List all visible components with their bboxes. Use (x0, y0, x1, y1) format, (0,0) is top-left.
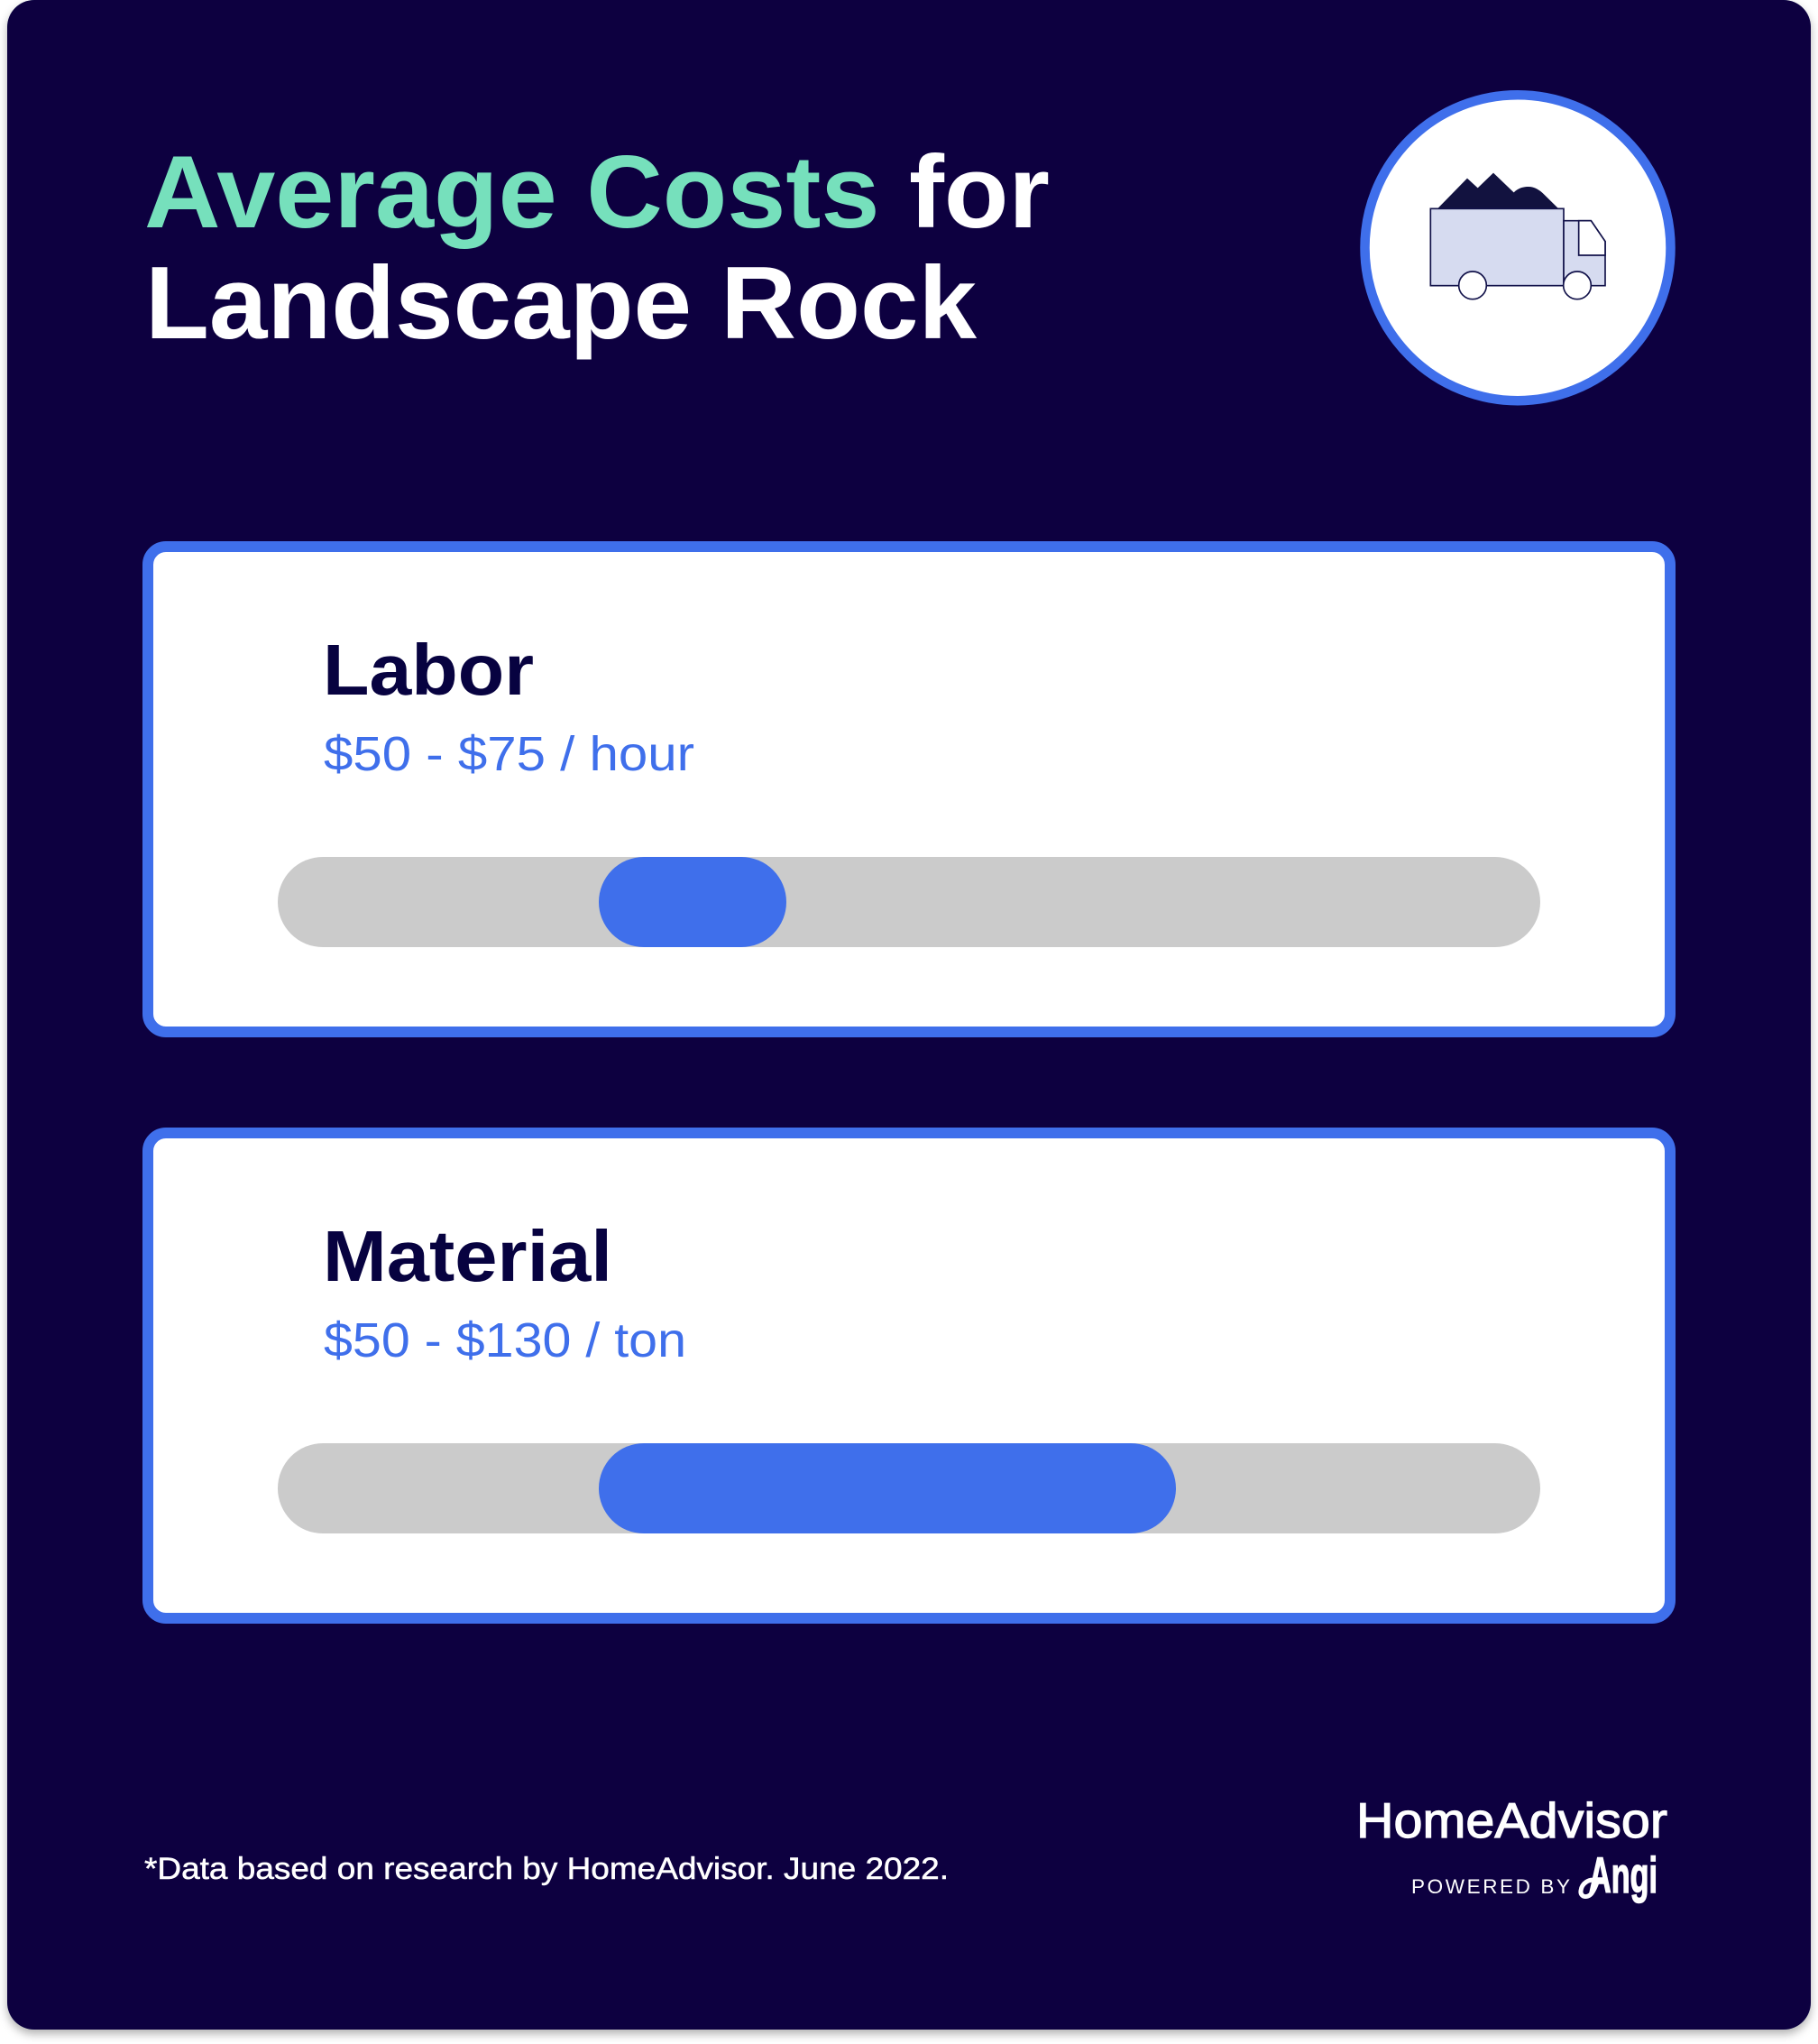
HomeAdvisor wordmark: HomeAdvisor (1356, 1792, 1667, 1848)
title line 2: Landscape Rock (145, 246, 978, 361)
title line 1: Average Costs for (144, 135, 1050, 250)
logo: HomeAdvisor powered by Angi (1356, 1792, 1667, 1903)
material range bar (278, 1443, 1540, 1533)
material heading: Material (323, 1216, 612, 1296)
labor heading: Labor (323, 630, 534, 710)
bar highlighted range (599, 1443, 1176, 1533)
truck (1430, 173, 1605, 299)
cab window (1579, 221, 1605, 255)
card frame (148, 1133, 1670, 1618)
Angi text: Angi (1589, 1846, 1657, 1903)
cargo box (1430, 208, 1564, 286)
Angi wordmark (1581, 1846, 1657, 1903)
bar track (278, 857, 1540, 947)
rock pile (1437, 173, 1558, 208)
bar highlighted range (599, 857, 786, 947)
title (144, 135, 1050, 361)
icon: truck carrying rocks in circle (1365, 95, 1670, 401)
cab (1564, 221, 1605, 286)
icon circle (1365, 95, 1670, 401)
card frame (148, 547, 1670, 1032)
powered by label: POWERED BY (1411, 1875, 1570, 1898)
labor cost range: $50 - $75 / hour (324, 727, 694, 781)
panel: labor (148, 547, 1670, 1032)
footnote: *Data based on research by HomeAdvisor. June 2022. (144, 1852, 949, 1886)
Angi loop flourish (1581, 1880, 1598, 1897)
labor range bar (278, 857, 1540, 947)
front wheel (1564, 272, 1591, 299)
rear wheel (1459, 272, 1486, 299)
material cost range: $50 - $130 / ton (324, 1313, 686, 1367)
panel: material (148, 1133, 1670, 1618)
bar track (278, 1443, 1540, 1533)
